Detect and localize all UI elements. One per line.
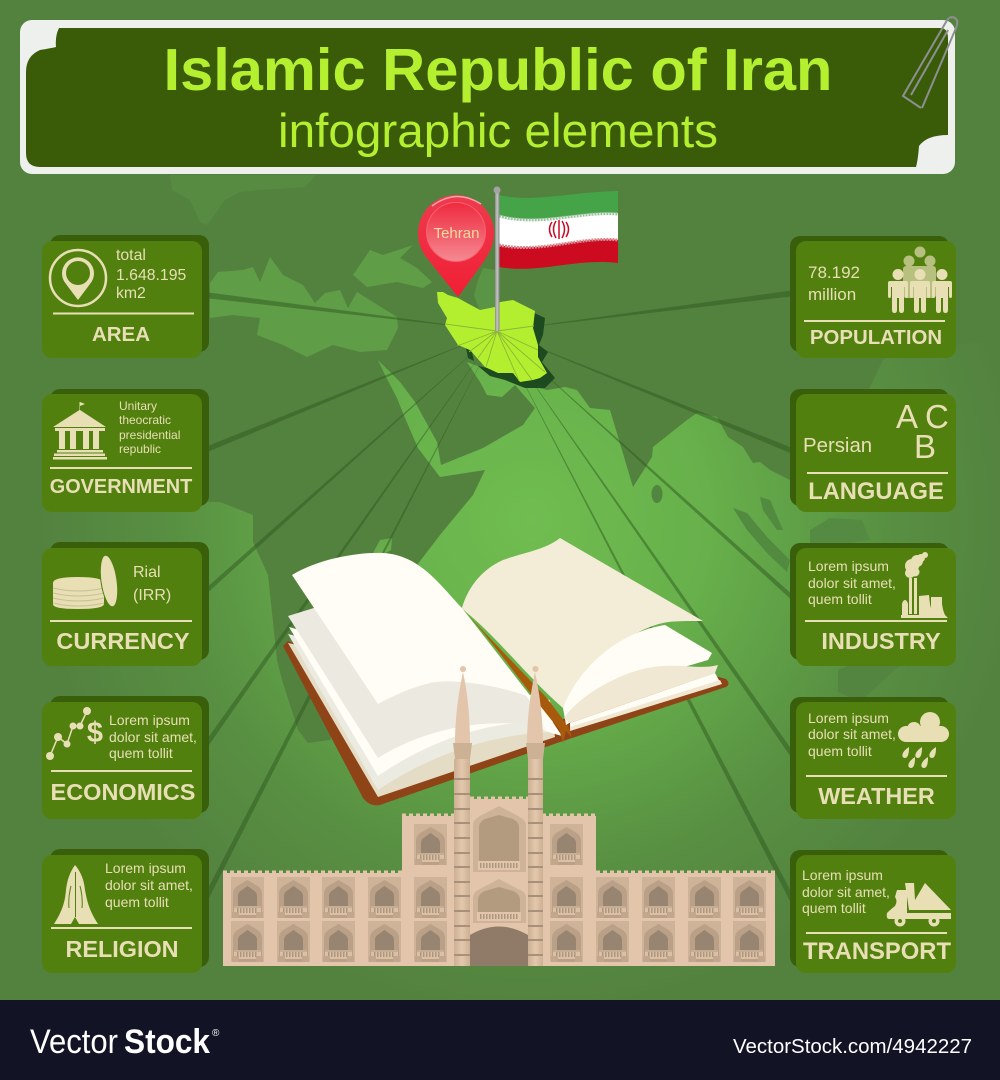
economics text: quem tollit (109, 745, 173, 761)
logo wordmark: ® (212, 1028, 220, 1039)
subheading: infographic elements (278, 105, 718, 158)
religion text: dolor sit amet, (105, 877, 193, 893)
weather text: dolor sit amet, (808, 726, 896, 742)
icon: growth chart and dollar: $ (87, 717, 103, 749)
heading: country name: Islamic Republic of Iran (164, 36, 832, 103)
language heading: LANGUAGE (808, 479, 944, 505)
panel: economics (42, 696, 209, 819)
minarets (453, 666, 545, 966)
panel: industry (790, 543, 956, 666)
icon: paperclip (903, 17, 957, 108)
icon: praying hands (54, 865, 98, 924)
religion text: quem tollit (105, 894, 169, 910)
map of Iran (437, 292, 555, 388)
industry text: dolor sit amet, (808, 575, 896, 591)
icon: factory (901, 552, 948, 618)
economics heading: ECONOMICS (51, 779, 195, 805)
panel: transport (790, 850, 956, 973)
panel: area (42, 235, 209, 358)
currency heading: CURRENCY (56, 628, 190, 654)
panel: government (42, 389, 209, 512)
weather text: Lorem ipsum (808, 710, 889, 726)
icon: growth chart and dollar (46, 707, 103, 760)
population value: 78.192 (808, 263, 860, 282)
icon: rain cloud (898, 712, 949, 768)
open book (283, 538, 728, 805)
flag of Iran (499, 191, 618, 269)
language value: Persian (803, 435, 872, 457)
government text: republic (119, 442, 161, 456)
area value: km2 (116, 285, 146, 302)
area heading: AREA (92, 323, 150, 346)
population heading: POPULATION (810, 327, 942, 349)
currency value: (IRR) (133, 587, 171, 604)
religion text: Lorem ipsum (105, 860, 186, 876)
area value: 1.648.195 (116, 267, 186, 284)
pin label: Tehran (434, 225, 479, 242)
government text: theocratic (119, 413, 171, 427)
mosque (223, 666, 775, 966)
transport text: Lorem ipsum (802, 867, 883, 883)
icon: dump truck (887, 883, 951, 926)
image id: VectorStock.com/4942227 (733, 1036, 972, 1058)
icon: people group (888, 246, 952, 313)
wing niches (231, 824, 766, 962)
religion heading: RELIGION (65, 936, 179, 962)
footer bar (0, 1000, 1000, 1080)
transport heading: TRANSPORT (803, 938, 951, 965)
icon: letters: C (925, 398, 949, 435)
panel: religion (42, 849, 209, 973)
icon: letters: B (914, 428, 936, 465)
industry text: Lorem ipsum (808, 558, 889, 574)
panel: currency (42, 542, 209, 666)
population value: million (808, 285, 856, 304)
logo wordmark (30, 1023, 220, 1061)
map pin: Tehran (418, 195, 494, 297)
currency value: Rial (133, 564, 161, 581)
icon: government building (53, 402, 107, 460)
industry heading: INDUSTRY (821, 628, 941, 654)
logo wordmark: Vector (30, 1023, 118, 1061)
weather text: quem tollit (808, 743, 872, 759)
weather heading: WEATHER (818, 783, 935, 809)
icon: location pin (50, 250, 106, 306)
panel: language (790, 389, 956, 512)
icon: coins (53, 554, 121, 609)
icon: letters: A (896, 398, 918, 435)
flag pole (494, 186, 500, 331)
connector rays (202, 290, 799, 905)
economics text: Lorem ipsum (109, 712, 190, 728)
transport text: dolor sit amet, (802, 884, 890, 900)
industry text: quem tollit (808, 591, 872, 607)
logo wordmark: Stock (124, 1023, 210, 1061)
panel: weather (790, 697, 956, 819)
transport text: quem tollit (802, 900, 866, 916)
area value: total (116, 247, 146, 264)
central portal (470, 806, 528, 966)
government heading: GOVERNMENT (50, 476, 192, 498)
title banner (20, 17, 957, 174)
government text: presidential (119, 428, 180, 442)
government text: Unitary (119, 399, 157, 413)
panel: population (790, 236, 956, 358)
economics text: dolor sit amet, (109, 729, 197, 745)
